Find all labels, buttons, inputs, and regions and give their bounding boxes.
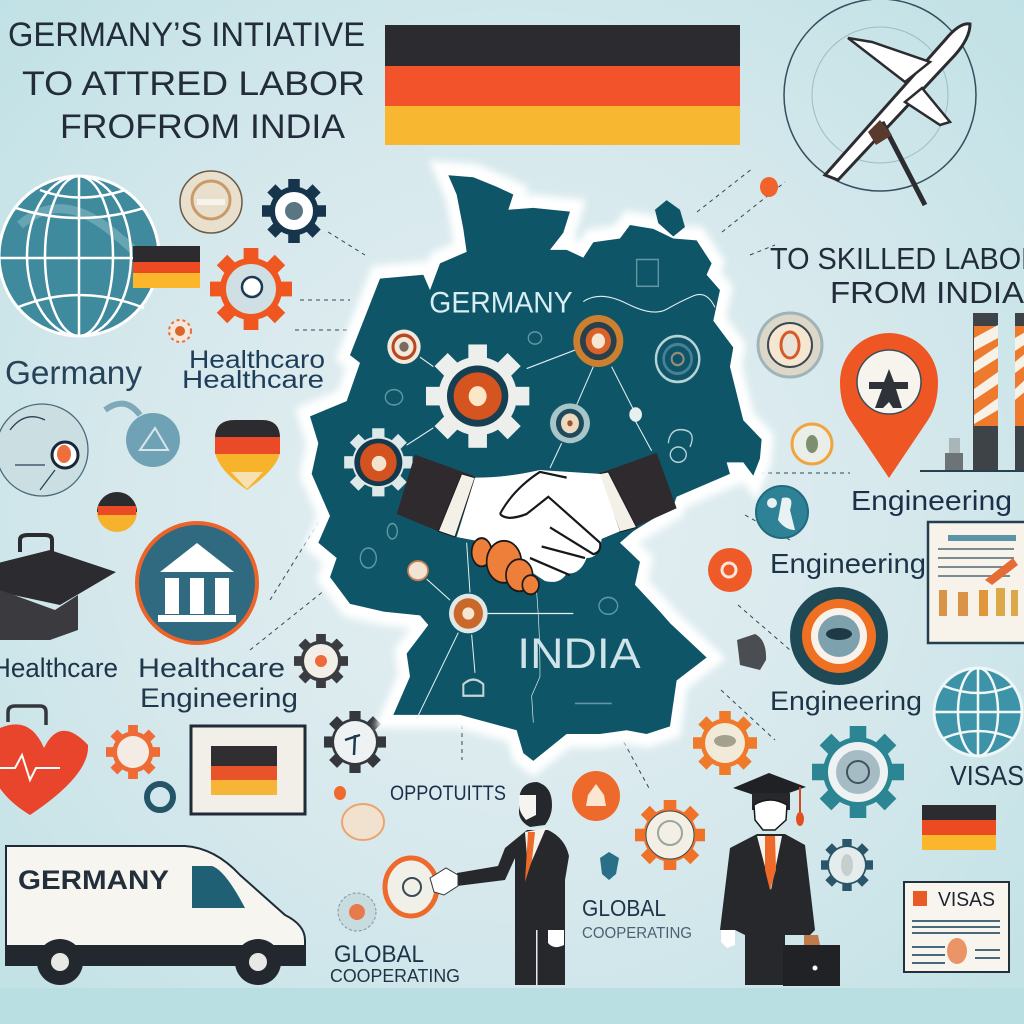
icon: yellow ring [792,424,832,464]
icon: small white gear [344,428,412,496]
icon: sketched circle [0,404,88,496]
icon: orange splat [708,548,752,592]
icon: grey helmet [737,634,766,670]
icon: lower node [449,594,488,633]
label: global cooperating left: COOPERATING [330,966,460,986]
icon: grey gear [821,839,873,891]
label: global cooperating left: GLOBAL [334,941,424,968]
icon: blue disc [105,404,180,467]
icon: small orange mark [169,320,191,342]
document: visas card [904,882,1009,972]
title [8,16,365,146]
title: GERMANY’S INTIATIVE [8,16,365,54]
text: to skilled labor from India: FROM INDIA [830,275,1024,310]
icon: orange gear lower [693,711,757,775]
icon: airplane in circle [784,0,976,205]
document: visas card: VISAS [938,889,995,911]
handshake [397,453,677,594]
flag: small right [922,805,996,850]
icon: map node ring [387,330,421,364]
icon: orange disc [572,771,620,821]
icon: heart [0,706,88,815]
connector lines [250,168,850,790]
icon: faint map glyphs [360,260,658,703]
icon: location pin [840,333,938,478]
icon: teal gear [812,726,904,818]
icon: navy gear [262,179,326,243]
label: Germany: Germany [5,354,142,391]
figure: businessman [430,782,569,985]
label: map India: INDIA [517,630,641,678]
icon: orange gear centre [635,800,705,870]
icon: teal shield [600,852,619,880]
label: Healthcare double: Healthcare [182,366,324,394]
icon: small bloom [338,893,376,931]
icon: orange node [573,315,623,367]
icon: delivery van: GERMANY [18,865,169,895]
icon: target disc [790,587,888,685]
icon: chimneys [920,313,1024,472]
label: Healthcare double: Healthcaro [189,346,325,374]
label: global cooperating centre: COOPERATING [582,925,692,942]
icon: white dot [629,407,642,422]
icon: flag circle [97,492,137,532]
label: opportunities: OPPOTUITTS [390,782,506,805]
icon: small beige disc [342,804,384,840]
icon: globe with flag [0,176,200,336]
text: to skilled labor from India [770,241,1024,310]
icon: delivery van [6,846,305,985]
label: map Germany: GERMANY [429,286,573,319]
icon: graduation cap [0,535,116,640]
icon: dark gear arrow [324,711,386,773]
map: Germany [310,175,762,761]
icon: orange disc held [385,858,437,916]
label: engineering three: Engineering [770,686,922,716]
icon: temple [137,523,257,643]
icon: framed flag [191,726,305,814]
label: Healthcare double [182,346,325,394]
label: global cooperating left [330,941,460,986]
figure: graduate [720,773,840,986]
document: chart report [928,522,1024,643]
label: global cooperating centre [582,895,692,942]
label: healthcare engineering: Healthcare [138,653,285,683]
icon: beige disc [180,171,242,233]
title: TO ATTRED LABOR [22,65,365,103]
label: engineering one: Engineering [851,485,1012,516]
label: healthcare engineering [138,653,298,713]
icon: globe right [934,668,1022,756]
label: engineering two: Engineering [770,548,926,579]
icon: beige disc right [758,313,822,377]
icon: big white gear [426,344,529,448]
icon: centre node [550,403,590,443]
icon: sun gear [106,725,160,779]
icon: lower map glyph [463,680,483,696]
icon: teal circle [756,486,808,538]
icon: small ring [147,784,173,810]
icon: small orange node [408,561,428,580]
icon: orange drop [334,786,346,800]
icon: blue ring node [656,336,699,382]
icon: orange dot top right [760,177,778,197]
icon: orange gear [210,248,292,330]
title: FROFROM INDIA [60,108,345,146]
label: global cooperating centre: GLOBAL [582,895,666,921]
icon: dark gear [294,634,348,688]
icon: flag heart [215,420,280,490]
label: healthcare engineering: Engineering [140,683,298,713]
flag: Germany large [385,25,740,145]
icon: outlined node [668,430,692,462]
